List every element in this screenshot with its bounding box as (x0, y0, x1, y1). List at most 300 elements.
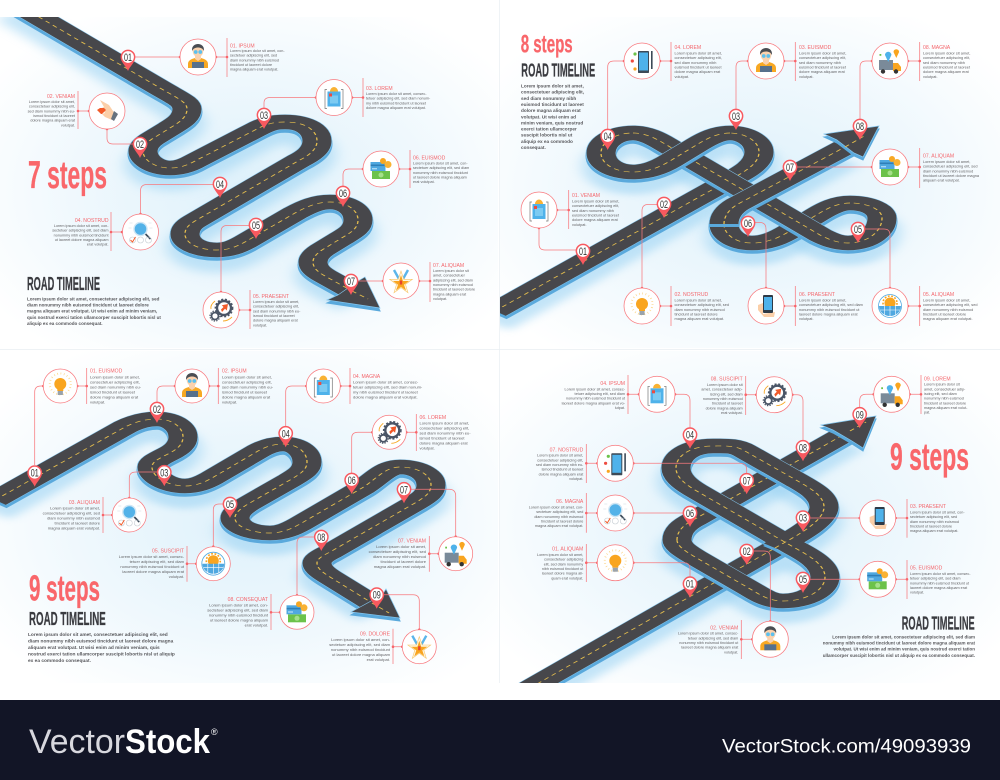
icon: person (748, 43, 784, 79)
icon: person (175, 369, 209, 403)
text block (28, 94, 76, 127)
step 01 euismod (27, 368, 142, 487)
text block: 05. ALIQUAM (923, 292, 954, 298)
text block: ut laoreet dolore magna aliquam (55, 238, 108, 242)
text block: tetuer adipiscing elit, sed diam (575, 392, 625, 396)
text block: nonummy nibh euismod tincidunt ut (910, 581, 970, 585)
text block: Lorem ipsum dolor sit (707, 383, 743, 387)
text block: euismod tincidunt ut laoreet (799, 66, 847, 70)
text block: 08. CONSEQUAT (228, 597, 268, 603)
icon: hand holding phone (748, 288, 784, 324)
pin 01: 01 (31, 468, 39, 480)
text block: Lorem ipsum dolor sit amet, (923, 298, 970, 302)
text block: diam nonummy nibh euismod (534, 515, 583, 519)
text block: laoreet dolore magna aliquam erat (799, 313, 858, 317)
icon: magnifier (597, 495, 633, 531)
pin 04 (278, 426, 293, 447)
pin 03 (796, 510, 810, 532)
pin 02: 02 (743, 546, 751, 558)
intro paragraph: volutpat. Ut wisi enim ad minim veniam, quis nostrud exerci tation (833, 647, 975, 652)
icon: magnifier (112, 498, 146, 532)
text block: sed diam nonummy nibh (674, 61, 716, 65)
text block (701, 377, 744, 415)
text block: consectetuer adipiscing elit, sed (923, 165, 978, 169)
text block: sectetuer adipiscing elit, sed diam (413, 166, 469, 170)
text block: volutpat. (169, 574, 184, 579)
connector (586, 493, 683, 533)
text block: dolore magna aliquam erat (923, 70, 970, 74)
text block: tincidunt ut laoreet dolore (910, 525, 952, 529)
text block: dolore magna aliquam erat (253, 319, 299, 323)
text block: 02. VENIAM (710, 625, 738, 631)
text block: volutpat. (799, 75, 814, 79)
text block: 08. SUSCIPIT (711, 377, 743, 383)
text block: magna aliquam erat (433, 292, 467, 296)
text block (222, 369, 274, 404)
step 07 veniam (369, 482, 473, 572)
connector (128, 38, 227, 77)
pin 01: 01 (124, 52, 132, 64)
text block: iscing elit, sed diam (924, 392, 957, 396)
text block: sed diam nonummy nibh (799, 61, 841, 65)
text block: consectetuer adipiscing elit, (420, 426, 469, 430)
text block: euismod tincidunt ut laoreet (674, 66, 722, 70)
intro paragraph: suscipit lobortis nisl ut (521, 133, 573, 138)
text block: 02. VENIAM (47, 94, 75, 100)
intro paragraph: dolore magna aliquam erat (521, 108, 581, 113)
text block: diam nonummy nibh euismod (910, 520, 959, 524)
text block: amet, consectetuer (433, 274, 466, 278)
text block (537, 546, 584, 580)
connector (358, 262, 430, 302)
text block: nonummy nibh euismod (703, 397, 743, 401)
text block: Lorem ipsum dolor sit amet, (674, 52, 722, 56)
text block: tincidunt ut laoreet dolore (924, 401, 966, 405)
text block: volutpat. (724, 650, 738, 654)
text block (923, 45, 971, 79)
intro paragraph: nostrud exerci tation ullamcorper suscipit lobortis nisl ut aliquip (28, 652, 175, 658)
step 04 lorem (600, 42, 722, 150)
text block (43, 500, 101, 530)
intro paragraph: sed diam nonummy nibh (521, 96, 576, 101)
pin 02: 02 (136, 139, 144, 151)
icon: globe with gear (196, 547, 230, 581)
text block: 01. VENIAM (572, 193, 600, 199)
connector (286, 368, 350, 426)
step 05 aliquam (851, 222, 978, 326)
text block: magna aliquam erat volutpat. (230, 68, 278, 72)
icon: person (752, 621, 788, 657)
text block (207, 597, 269, 628)
road with 7 stops (10, 0, 380, 311)
panel background (0, 17, 498, 348)
pin 07: 07 (743, 475, 751, 487)
pin 07 (739, 473, 754, 494)
panel: 9 steps looped road (510, 365, 990, 683)
text block (366, 86, 431, 110)
pin 02: 02 (660, 199, 668, 211)
intro paragraph: euismod tincidunt ut laoreet (521, 102, 584, 107)
intro paragraph: Lorem ipsum dolor sit amet, consectetuer adipiscing elit, sed (27, 296, 159, 302)
icon: clipboard (306, 369, 340, 403)
connector (103, 472, 157, 533)
text block (572, 193, 620, 227)
intro paragraph: Lorem ipsum dolor sit amet, consectetuer adipiscing elit, sed diam (832, 634, 975, 639)
pin 05: 05 (226, 499, 234, 511)
text block: Lorem ipsum dolor sit amet, (222, 374, 272, 379)
text block: 05. EUISMOD (910, 566, 943, 572)
text block: tetuer adipiscing elit, sed diam nonum- (353, 384, 423, 390)
text block: volutpat. (253, 323, 267, 327)
step 02 ipsum (150, 368, 274, 423)
pin 08: 08 (799, 442, 807, 454)
pin 09: 09 (856, 409, 864, 421)
text block: lutpat. (615, 406, 625, 410)
text block (433, 263, 475, 301)
text block: erat volutpat. (367, 657, 390, 662)
text block: sed diam nonummy nibh eu- (222, 384, 274, 389)
text block: ut laoreet dolore magna aliquam (332, 652, 391, 657)
text block: volutpat. (61, 123, 75, 127)
winding road with 9 stops (0, 419, 431, 621)
text block: tetuer adipiscing elit, sed diam nonum- (366, 97, 431, 101)
icon: globe with gear (872, 288, 908, 324)
step 04 ipsum (562, 375, 697, 449)
step 05 praesent (203, 218, 301, 329)
text block: 06. EUISMOD (413, 155, 446, 161)
text block: 09. LOREM (924, 376, 951, 382)
pin 06: 06 (744, 218, 752, 230)
text block (674, 45, 722, 79)
intro paragraph: Lorem ipsum dolor sit amet, consectetuer adipiscing elit, sed (28, 633, 168, 638)
text block: amet, consectetuer adip- (924, 387, 966, 391)
step 04 magna (278, 368, 423, 447)
text block: consectetuer adipiscing elit, (799, 56, 846, 60)
text block: volutpat. (433, 297, 447, 301)
text block: magna aliquam erat volutpat. (674, 317, 724, 321)
text block: ismod tincidunt ut laoreet (222, 389, 268, 394)
icon: clipboard (316, 80, 352, 116)
text block: nibh euismod tincidunt ut (542, 567, 584, 571)
text block: Lorem ipsum dolor sit amet, (537, 454, 583, 458)
text block: 03. EUISMOD (799, 45, 832, 51)
intro paragraph: ullamcorper suscipit lobortis nisl ut aliquip ex ea commodo consequat. (823, 653, 975, 658)
text block: ismod tincidunt ut laoreet (90, 389, 136, 394)
text block: my nibh euismod tincidunt ut laoreet (366, 101, 427, 105)
text block: laoreet dolore magna aliquam erat (681, 646, 739, 650)
text block: 04. MAGNA (353, 374, 381, 380)
text block: ismod tincidunt ut laoreet (253, 314, 296, 318)
step 08 suscipit (701, 376, 810, 461)
icon: money and cards (860, 561, 896, 597)
text block: Lorem ipsum dolor sit (924, 383, 960, 387)
text block (529, 499, 584, 528)
intro paragraph: nonummy nibh euismod tincidunt ut laoreet dolore magna aliquam erat (823, 640, 975, 645)
text block: tincidunt ut laoreet dolore (230, 63, 272, 67)
pin 05: 05 (854, 224, 862, 236)
text block: tincidunt ut laoreet dolore (433, 288, 475, 292)
pin 07: 07 (400, 484, 408, 496)
text block: sectetuer adipiscing elit, sed (536, 510, 583, 514)
heading: road timeline: ROAD TIMELINE (521, 61, 595, 81)
text block: magna aliquam erat volutpat. (923, 317, 973, 321)
text block (90, 369, 142, 404)
text block: sed diam nonummy nibh eu- (536, 463, 584, 467)
text block: sed diam nonummy nibh (923, 61, 965, 65)
icon: light bulb (597, 545, 633, 581)
text block: ut laoreet dolore magna aliquam (210, 618, 269, 622)
text block: Lorem ipsum dolor sit amet, (799, 298, 846, 302)
text block: sed diam nonummy nibh eu- (28, 109, 76, 113)
text block: sed diam nonummy nibh (572, 209, 614, 213)
text block: euismod tincidunt ut laoreet (923, 66, 971, 70)
text block: 01. ALIQUAM (552, 546, 583, 552)
icon: delivery truck (439, 537, 473, 571)
text block: sectetuer adipiscing elit, sed diam (52, 229, 108, 233)
pin 03: 03 (732, 111, 740, 123)
step 06 praesent (741, 216, 863, 326)
text block: Lorem ipsum dolor sit amet, (923, 160, 970, 164)
text block: nonummy nibh euismod tincidunt ut (566, 397, 626, 401)
intro paragraph: diam nonummy nibh euismod tincidunt ut laoreet dolore (27, 303, 149, 308)
text block: erat volutpat. (721, 411, 743, 415)
text block: tincidunt ut laoreet dolore (674, 313, 718, 317)
pin 06: 06 (348, 475, 356, 487)
text block: 05. PRAESENT (253, 294, 289, 300)
intro paragraph: exerci tation ullamcorper (521, 127, 577, 132)
text block: volutpat. (674, 75, 689, 79)
icon: money and cards (363, 151, 399, 187)
text block: tetuer adipiscing elit, sed diam (910, 577, 960, 581)
text block: Lorem ipsum dolor sit amet, con- (529, 506, 583, 510)
text block: diam nonummy nibh euismod (230, 58, 279, 62)
text block: Lorem ipsum dolor sit amet, consec- (565, 387, 625, 391)
text block: 04. LOREM (674, 45, 701, 51)
icon: light bulb (43, 369, 77, 403)
looped road with 9 stops (530, 416, 876, 701)
pin 04: 04 (282, 428, 290, 440)
pin 01 (121, 50, 135, 71)
text block: ismod tincidunt ut laoreet (33, 114, 76, 118)
text block: tetuer adipiscing elit, sed diam (688, 636, 738, 640)
connector (384, 595, 419, 664)
text block: Lorem ipsum dolor sit (433, 269, 469, 273)
text block (329, 632, 391, 662)
text block: consectetuer adipiscing elit, (29, 105, 75, 109)
text block: Lorem ipsum dolor sit amet, consec- (910, 572, 970, 576)
intro paragraph: Lorem ipsum dolor sit amet, (521, 84, 584, 88)
connector (111, 184, 213, 251)
icon: clipboard (521, 192, 557, 228)
text block (674, 292, 729, 321)
text block: 04. NOSTRUD (75, 218, 109, 224)
text block: laoreet dolore magna aliquam erat vo- (562, 401, 626, 405)
text block: nonummy nibh euismod tincidunt (209, 612, 269, 618)
text block: magna aliquam erat volut- (924, 406, 968, 410)
text block: consectetuer adipiscing elit, sed (674, 303, 729, 307)
text block: 07. ALIQUAM (923, 154, 954, 160)
connector (642, 204, 671, 326)
text block: erat volutpat. (87, 243, 108, 247)
text block: Lorem ipsum dolor sit amet, con- (331, 637, 390, 642)
text block: magna aliquam erat volutpat. (910, 529, 958, 533)
step 03 aliquam (43, 465, 172, 533)
connector (608, 42, 671, 129)
connector (539, 190, 576, 250)
intro paragraph: magna aliquam erat volutpat. Ut wisi enim ad minim veniam, (27, 309, 157, 314)
icon: money and cards (280, 595, 314, 629)
connector (860, 42, 920, 119)
panel: 7 steps (0, 0, 498, 348)
text block: Lorem ipsum dolor sit amet, (50, 506, 100, 510)
panel background (500, 351, 1000, 683)
text block: diam nonummy nibh euismod (674, 308, 725, 312)
connector (865, 229, 920, 326)
text block: dolore magna aliquam erat (572, 218, 619, 222)
text block: volutpat. (572, 223, 587, 227)
pin 07 (783, 160, 797, 181)
text block: dolore magna aliquam erat (30, 119, 76, 123)
pin 03: 03 (799, 513, 807, 525)
text block: consectetuer adipiscing (544, 558, 583, 562)
text block: nonummy nibh euismod (924, 397, 964, 401)
text block: dolore magna aliquam erat (420, 440, 469, 446)
text block: nonummy nibh euismod tincidunt ut (799, 308, 860, 312)
text block: ut laoreet dolore magna aliquam (413, 176, 467, 180)
text block: sed diam nonummy nibh eu- (253, 309, 301, 313)
text block: consectetuer adipiscing elit, (90, 379, 140, 384)
text block: Lorem ipsum dolor sit amet, (537, 553, 583, 557)
step 02 nostrud (624, 197, 729, 326)
step 06 magna (529, 493, 697, 533)
text block: laoreet dolore magna ali- (542, 572, 584, 576)
text block: dolore magna aliquam erat volutpat. (366, 106, 426, 110)
pin 05: 05 (799, 574, 807, 586)
footer logo: ® (211, 727, 218, 737)
intro paragraph: aliquip ex ea commodo (521, 139, 573, 144)
text block: dolore magna aliquam erat volutpat. (353, 394, 418, 400)
title: 8 steps: 8 steps (521, 31, 573, 59)
text block: Lorem ipsum dolor sit amet, consec- (353, 380, 418, 384)
step 06 euismod (336, 150, 469, 207)
text block: Lorem ipsum dolor sit amet, consec- (678, 632, 738, 636)
pin 05 (796, 572, 810, 593)
panel background (500, 17, 1000, 348)
text block (923, 292, 978, 321)
text block: Lorem ipsum dolor sit amet, (420, 420, 469, 426)
pin 09: 09 (373, 590, 381, 602)
text block: 03. PRAESENT (910, 504, 946, 510)
text block: Lorem ipsum dolor sit amet, (376, 544, 426, 549)
text block: sectetuer adipiscing elit, sed (230, 54, 277, 58)
text block: laoreet dolore magna aliquam erat (910, 586, 968, 590)
pin 07: 07 (347, 276, 355, 288)
text block (562, 381, 626, 410)
connector (746, 376, 803, 440)
connector (860, 375, 921, 414)
text block: dolore magna aliquam erat (222, 394, 271, 399)
text block: iscing elit, sed diam (710, 392, 743, 396)
pin 06 (683, 506, 697, 527)
text block: erat volutpat. (413, 180, 435, 184)
pin 01: 01 (579, 246, 587, 258)
connector (810, 560, 907, 599)
text block: sectetuer adipiscing elit, sed (910, 515, 957, 519)
connector (78, 91, 133, 144)
text block: 09. DOLORE (360, 632, 391, 638)
icon: gears (203, 292, 239, 328)
text block: Lorem ipsum dolor sit amet, con- (413, 162, 468, 166)
text block (678, 625, 739, 654)
text block (52, 218, 109, 247)
text block: 07. VENIAM (398, 539, 426, 545)
intro paragraph: minim veniam, quis nostrud (521, 120, 583, 125)
connector (343, 150, 410, 188)
connector (741, 551, 770, 659)
step 03 euismod (729, 42, 847, 130)
text block: consectetuer adipiscing elit, (537, 458, 583, 462)
text block: volutpat. (799, 317, 814, 321)
connector (35, 368, 87, 465)
text block: Lorem ipsum dolor sit amet, (253, 300, 299, 304)
connector (411, 489, 456, 572)
text block: tincidunt ut laoreet dolore (541, 520, 583, 524)
icon: gears (756, 377, 792, 413)
step 01 veniam (521, 190, 620, 265)
text block: magna aliquam erat volutpat. (48, 526, 100, 530)
footer band (0, 700, 1000, 780)
connector (755, 222, 795, 326)
title: 7 steps: 7 steps (28, 154, 107, 197)
text block: Lorem ipsum dolor sit amet, con- (230, 49, 285, 53)
text block: nonummy nibh euismod tincidunt ut (679, 641, 739, 645)
pin 06: 06 (339, 188, 347, 200)
icon: magnifier (122, 214, 158, 250)
text block: 01. EUISMOD (90, 369, 123, 375)
step 03 lorem (257, 78, 431, 129)
step 07 aliquam (783, 148, 980, 188)
text block: dolore magna aliquam erat (90, 394, 139, 399)
infinity road with 8 stops (495, 126, 882, 324)
title: 9 steps: 9 steps (29, 568, 100, 609)
text block: volutpat. (420, 446, 435, 450)
text block: 08. MAGNA (923, 45, 951, 51)
icon: hand holding phone (860, 500, 896, 536)
text block: diam nonummy nibh euismod (373, 554, 426, 559)
intro paragraph: volutpat. Ut wisi enim ad (521, 114, 576, 119)
text block: tincidunt ut laoreet dolore (381, 559, 427, 564)
pin 08: 08 (856, 121, 864, 133)
text block (799, 45, 847, 79)
text block: 06. LOREM (420, 415, 446, 421)
text block: sectetuer adipiscing elit, sed diam (329, 642, 391, 647)
text block: Lorem ipsum dolor sit amet, (674, 298, 722, 302)
text block: consectetuer adipiscing elit, (222, 379, 272, 384)
icon: hand with gem (89, 93, 125, 129)
intro paragraph: consectetuer adipiscing elit, (521, 90, 584, 95)
text block: volutpat. (222, 399, 237, 404)
text block: volutpat. (923, 75, 938, 79)
text block: 07. NOSTRUD (550, 447, 584, 453)
text block: consectetuer adipiscing elit, (674, 56, 722, 60)
text block: Lorem ipsum dolor sit amet, consec- (366, 92, 426, 96)
icon: light bulb (624, 288, 660, 324)
text block: 03. LOREM (366, 86, 393, 92)
text block: dolore magna aliquam erat (799, 70, 846, 74)
text block: aliquam erat volutpat. (923, 179, 960, 183)
text block: 06. MAGNA (556, 499, 584, 505)
text block: 01. IPSUM (230, 43, 255, 49)
